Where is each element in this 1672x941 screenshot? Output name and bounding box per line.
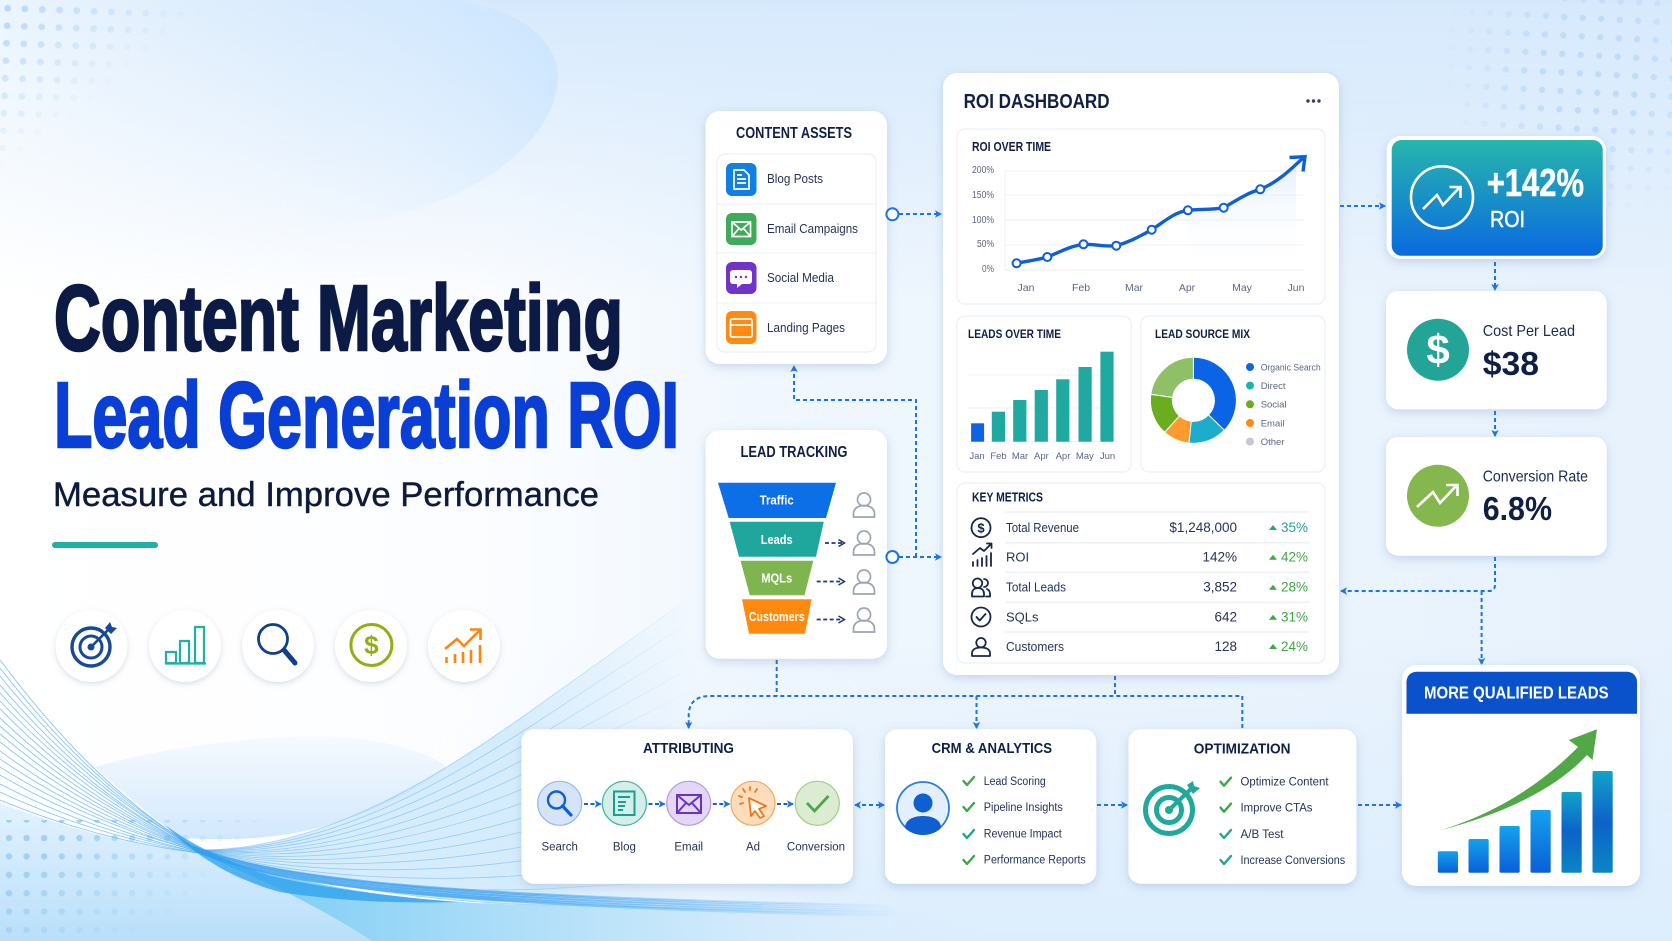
metric: total leads: 28% <box>1281 580 1308 595</box>
checklist: Performance Reports <box>984 855 1086 867</box>
heading: MORE QUALIFIED LEADS <box>1424 682 1609 702</box>
step: conversion: Conversion <box>787 841 845 853</box>
chart: roi over time: Feb <box>1072 282 1090 294</box>
legend <box>1246 362 1321 448</box>
panel: attributing <box>522 729 853 884</box>
metric: total revenue: Total Revenue <box>1006 520 1079 535</box>
asset: social media: Social Media <box>767 271 834 285</box>
chart: leads over time: Feb <box>990 451 1007 462</box>
icon: magnifier <box>242 610 314 682</box>
funnel: mqls <box>740 561 813 595</box>
step: blog: Blog <box>613 841 636 853</box>
metric: total revenue: 35% <box>1281 520 1308 535</box>
chart: roi over time: 150% <box>972 190 994 201</box>
chart: roi over time: 0% <box>982 264 994 275</box>
chart: leads over time: May <box>1076 451 1094 462</box>
chart: leads over time: Jun <box>1100 451 1115 462</box>
heading: LEAD TRACKING <box>740 444 848 461</box>
panel: lead tracking <box>706 430 887 659</box>
checklist: Improve CTAs <box>1240 803 1313 815</box>
legend: Direct <box>1261 381 1286 392</box>
funnel: mqls: MQLs <box>761 572 792 586</box>
metric: sqls <box>972 608 1308 626</box>
panel: content assets <box>706 111 887 364</box>
menu dots <box>1306 99 1321 103</box>
icon: target <box>56 610 128 682</box>
chart: leads over time: Apr <box>1056 451 1070 462</box>
chart: roi over time: Jan <box>1018 282 1035 294</box>
step: ad: Ad <box>746 841 760 853</box>
step: search <box>538 781 582 853</box>
funnel: customers <box>742 599 812 634</box>
metric: total revenue: $1,248,000 <box>1169 520 1237 535</box>
asset: blog posts <box>726 163 823 196</box>
metric: roi: ROI <box>1006 550 1029 565</box>
metric: sqls: SQLs <box>1006 610 1039 625</box>
step: blog <box>602 781 646 853</box>
node: content assets connector <box>886 208 898 220</box>
subtitle: Measure and Improve Performance <box>53 476 599 514</box>
panel: roi dashboard <box>943 73 1339 675</box>
metric: customers: 128 <box>1214 639 1237 654</box>
chart: lead source mix: LEAD SOURCE MIX <box>1155 329 1250 341</box>
step: ad <box>731 781 775 853</box>
metric: total leads: Total Leads <box>1006 580 1066 595</box>
chart: leads over time: Mar <box>1012 451 1028 462</box>
asset: email campaigns: Email Campaigns <box>767 222 858 236</box>
funnel: leads <box>730 522 824 557</box>
kpi: conversion rate <box>1386 437 1607 556</box>
table: key metrics <box>957 483 1325 663</box>
metric: roi <box>973 544 1308 566</box>
chart: leads over time: Apr <box>1034 451 1049 462</box>
chart: growth bars <box>1438 771 1613 873</box>
person icons <box>854 493 874 632</box>
checklist: Lead Scoring <box>984 776 1046 788</box>
title line 2: Lead Generation ROI <box>54 363 679 467</box>
panel: optimization <box>1128 729 1356 884</box>
checklist <box>964 776 1086 867</box>
funnel arrows <box>817 543 844 620</box>
funnel: traffic: Traffic <box>760 494 794 508</box>
icon: target <box>1146 781 1200 834</box>
step: search: Search <box>541 841 578 853</box>
icon: dollar <box>335 610 407 682</box>
metric: roi: 142% <box>1202 550 1237 565</box>
teal underline <box>52 542 158 548</box>
asset: email campaigns <box>726 213 858 245</box>
title line 1: Content Marketing <box>54 266 623 370</box>
chart: roi over time: 200% <box>972 165 994 176</box>
kpi: conversion rate: Conversion Rate <box>1483 469 1588 486</box>
funnel: customers: Customers <box>749 610 805 624</box>
chart: roi over time: 50% <box>977 239 994 250</box>
chart: roi over time: Mar <box>1125 282 1144 294</box>
header band <box>1406 672 1637 714</box>
panel: more qualified leads <box>1402 665 1640 886</box>
heading: ATTRIBUTING <box>643 740 734 757</box>
icon: person <box>897 782 949 835</box>
metric: customers: Customers <box>1006 639 1064 654</box>
icon row <box>56 610 500 682</box>
metric: roi: 42% <box>1281 550 1308 565</box>
chart: leads over time: Jan <box>969 451 985 462</box>
icon: growth <box>428 610 500 682</box>
connectors <box>689 206 1495 805</box>
checklist: Optimize Content <box>1240 777 1329 789</box>
metric: total revenue: $ <box>977 520 985 536</box>
chart: roi over time <box>957 129 1325 304</box>
kpi: conversion rate: 6.8% <box>1483 491 1552 528</box>
metric: customers <box>972 638 1308 656</box>
metric: sqls: 31% <box>1281 610 1308 625</box>
chart: leads over time <box>957 316 1131 472</box>
funnel: leads: Leads <box>761 533 793 547</box>
kpi: cost per lead: $38 <box>1483 346 1539 383</box>
icon: growth circle <box>1411 166 1473 228</box>
asset: landing pages <box>726 311 845 344</box>
step: email <box>667 781 711 853</box>
table: key metrics: KEY METRICS <box>972 491 1043 505</box>
chart: lead source mix <box>1141 316 1325 472</box>
panel: crm and analytics <box>885 729 1096 884</box>
legend: Email <box>1261 418 1284 429</box>
funnel: traffic <box>718 483 836 518</box>
chart: leads over time: LEADS OVER TIME <box>968 329 1061 341</box>
heading: CRM & ANALYTICS <box>932 740 1052 757</box>
checklist: Increase Conversions <box>1240 855 1345 867</box>
kpi: roi: +142% <box>1487 162 1584 205</box>
arrow: growth <box>1438 729 1597 831</box>
checklist: Revenue Impact <box>984 828 1063 840</box>
legend: Social <box>1261 400 1287 411</box>
legend: Organic Search <box>1261 362 1321 374</box>
metric: total leads <box>972 578 1308 596</box>
asset: blog posts: Blog Posts <box>767 172 823 186</box>
kpi: roi <box>1387 136 1606 259</box>
metric: customers: 24% <box>1281 639 1308 654</box>
kpi: cost per lead <box>1386 291 1607 409</box>
step: email: Email <box>674 841 703 853</box>
asset: landing pages: Landing Pages <box>767 321 845 335</box>
checklist: A/B Test <box>1240 829 1284 841</box>
checklist: Pipeline Insights <box>984 802 1063 814</box>
chart: roi over time: ROI OVER TIME <box>972 140 1051 154</box>
chart: roi over time: Jun <box>1288 282 1305 294</box>
background wave <box>0 602 892 941</box>
asset: social media <box>726 262 834 294</box>
chart: roi over time: 100% <box>972 215 994 226</box>
heading: ROI DASHBOARD <box>964 90 1110 113</box>
heading: CONTENT ASSETS <box>736 125 852 142</box>
node: lead tracking connector <box>886 551 898 563</box>
icon: dollar: $ <box>364 630 379 660</box>
legend: Other <box>1261 437 1284 448</box>
chart: roi over time: Apr <box>1179 282 1196 294</box>
step arrows <box>584 803 793 805</box>
chart: roi over time: May <box>1232 282 1253 294</box>
metric: sqls: 642 <box>1214 610 1237 625</box>
icon: bars <box>149 610 221 682</box>
kpi: roi: ROI <box>1490 206 1525 232</box>
metric: total leads: 3,852 <box>1203 580 1237 595</box>
heading: OPTIMIZATION <box>1194 740 1290 757</box>
kpi: cost per lead: $ <box>1426 326 1450 373</box>
metric: total revenue <box>972 518 1308 537</box>
kpi: cost per lead: Cost Per Lead <box>1483 323 1575 340</box>
title <box>54 266 679 467</box>
step: conversion <box>787 781 845 853</box>
checklist <box>1220 777 1345 867</box>
